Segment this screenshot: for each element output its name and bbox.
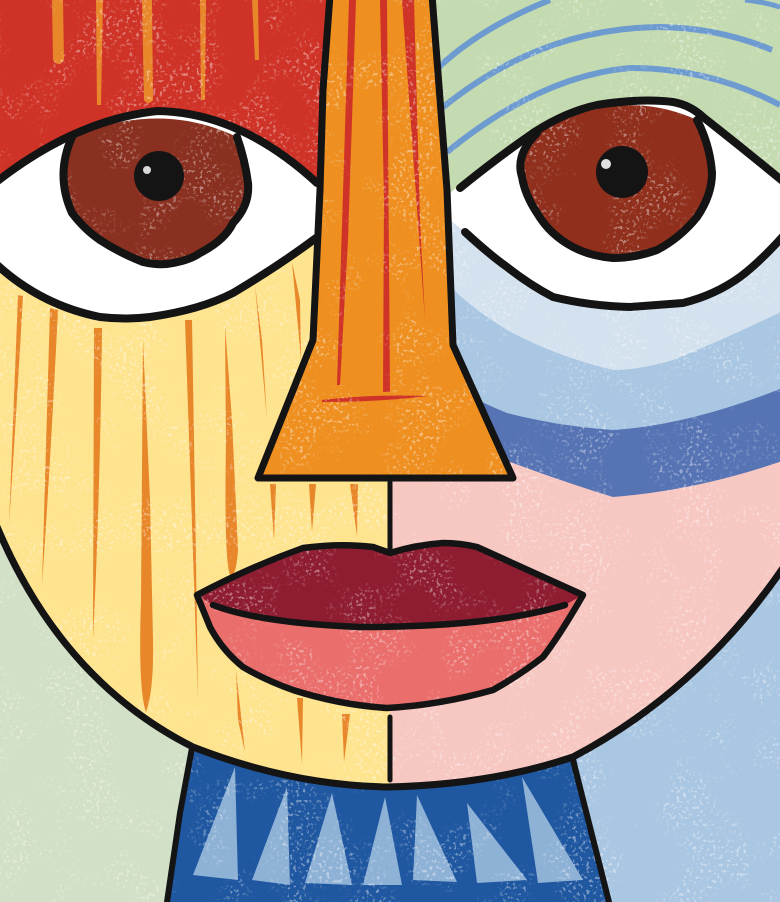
face: yellow left cheek — [0, 195, 390, 787]
nose outline — [258, 0, 513, 478]
right pupil — [596, 146, 648, 198]
nose fill — [258, 0, 513, 478]
left pupil — [134, 151, 184, 201]
face outline — [0, 522, 780, 787]
lips outline — [197, 543, 583, 708]
neck collar — [166, 735, 609, 902]
left eye fill — [0, 108, 317, 318]
right eye fill — [450, 98, 780, 307]
background: blue lower right — [390, 500, 780, 902]
background: green lower left — [0, 500, 390, 902]
center seam lines — [388, 482, 392, 780]
left eye outline — [0, 111, 317, 318]
neck outline — [167, 748, 609, 902]
lips fill — [197, 543, 583, 708]
forehead: red left panel — [0, 0, 335, 200]
right eye outline — [460, 101, 780, 307]
forehead: green right panel with blue lines — [430, 0, 780, 230]
face: pink right cheek — [390, 440, 780, 787]
face: blue bands under right eye — [440, 210, 780, 497]
